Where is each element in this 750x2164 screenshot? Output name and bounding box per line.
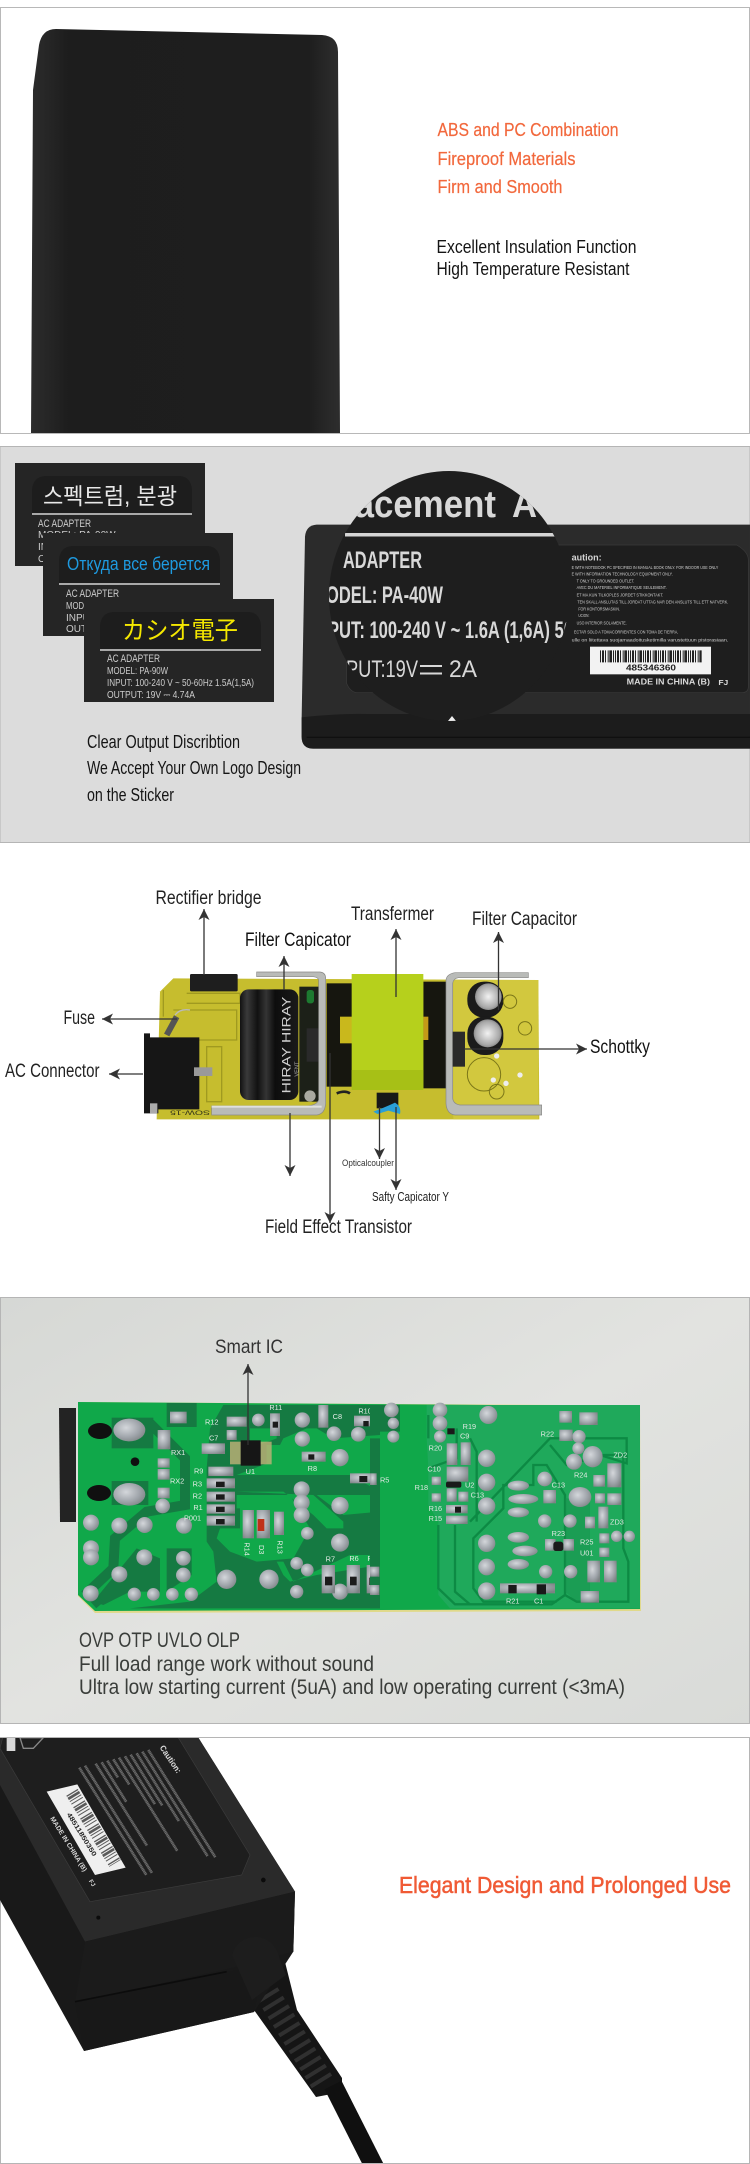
callout: Safty Capicator Y xyxy=(372,1107,449,1204)
adapter photo: 48511850350 xyxy=(65,1812,98,1858)
adapter photo with label: FJ xyxy=(718,678,728,687)
silkscreen labels left: R13 xyxy=(275,1540,284,1554)
adapter photo with label: AVEC DU MATERIEL INFORMATIQUE SEULEMENT. xyxy=(577,585,667,591)
sticker sample: Korean xyxy=(15,463,205,566)
filter capacitor large xyxy=(240,989,298,1100)
silkscreen labels left xyxy=(170,1403,377,1564)
magnifier lens over label: ADAPTER xyxy=(343,547,422,574)
panel background xyxy=(0,446,750,842)
yellow circuit board photo: HIRAY HIRAY xyxy=(280,997,294,1093)
silkscreen labels left: R11 xyxy=(269,1403,282,1412)
adapter photo with label: ECTAR SOLO A TOMACORRIENTES CON TOMA DE TIERRA. xyxy=(574,629,678,635)
adapter photo: MADE IN CHINA (B) xyxy=(48,1816,88,1873)
callout: Rectifier bridge: Rectifier bridge xyxy=(156,888,262,909)
silkscreen labels left: U1 xyxy=(246,1467,255,1476)
panel: PCB bottom view xyxy=(0,1298,750,1724)
orange feature list: Fireproof Materials xyxy=(438,149,576,169)
solder pads xyxy=(83,1405,380,1601)
sticker sample: Russian: MODEL: PA-90W xyxy=(66,601,126,612)
insulation description: Excellent Insulation Function xyxy=(436,237,636,257)
sticker sample: Korean: MODEL: PA-90W xyxy=(38,530,116,541)
sticker sample: Russian: AC ADAPTER xyxy=(66,588,119,600)
left heat sink xyxy=(212,972,326,1115)
sticker description text: on the Sticker xyxy=(87,785,174,805)
adapter photo: Caution: xyxy=(158,1743,184,1775)
sticker description text xyxy=(87,732,301,805)
right copper traces and pads: R21 xyxy=(506,1596,519,1605)
callout: Filter Capacitor: Filter Capacitor xyxy=(472,909,578,930)
silkscreen labels left: RX2 xyxy=(170,1476,184,1485)
transformer xyxy=(352,974,423,1090)
panel: housing material xyxy=(0,8,750,434)
sticker sample: Korean: INPUT xyxy=(38,542,68,553)
callout: Filter Capicator xyxy=(245,930,352,990)
protection features text xyxy=(79,1629,625,1699)
optocoupler and safety capacitor xyxy=(377,1093,398,1108)
sticker sample: Russian: Откуда все берется xyxy=(67,554,210,574)
sticker sample: Korean: OUTPUT xyxy=(38,554,79,565)
silkscreen labels left: R2 xyxy=(193,1491,202,1500)
magnifier lens over label: 2A xyxy=(449,656,477,683)
right copper traces and pads: R20 xyxy=(429,1444,442,1453)
sticker sample: Japanese: AC ADAPTER xyxy=(107,653,160,665)
sticker sample: Russian: OUTPUT: 19V xyxy=(66,624,130,635)
callout: Rectifier bridge xyxy=(156,888,262,975)
right copper traces and pads: R22 xyxy=(541,1429,554,1438)
adapter photo with label: ulle on liitettava suojamaadoitusketimilla varustettuun pistorasiaan. xyxy=(572,637,728,643)
panel: PCB top view xyxy=(5,888,650,1238)
adapter photo with label: USO INTERIOR SOLAMENTE. xyxy=(577,621,627,627)
silkscreen labels left: RX1 xyxy=(171,1448,185,1457)
insulation description xyxy=(436,237,636,279)
panel background xyxy=(0,1298,750,1724)
sticker sample: Japanese: OUTPUT: 19V ⎓ 4.74A xyxy=(107,690,195,701)
orange feature list xyxy=(438,120,618,197)
right copper traces and pads: U01 xyxy=(580,1549,593,1558)
callout: Smart IC xyxy=(215,1337,283,1445)
output capacitors xyxy=(467,982,503,1055)
adapter photo with label: E WITH INFORMATION TECHNOLOGY EQUIPMENT ONLY. xyxy=(572,572,673,578)
adapter photo with label: T ONLY TO GROUNDED OUTLET. xyxy=(577,578,634,584)
adapter photo with label: aution: xyxy=(572,553,602,563)
headline: Elegant Design and Prolonged Use xyxy=(399,1872,731,1898)
yellow circuit board photo: SOW-15 xyxy=(170,1109,210,1116)
sticker sample: Russian xyxy=(43,533,233,636)
right copper traces and pads: C9 xyxy=(460,1431,469,1440)
silkscreen labels left: R12 xyxy=(205,1417,218,1426)
silkscreen labels left: C8 xyxy=(333,1412,342,1421)
right copper traces and pads: U2 xyxy=(465,1481,474,1490)
sticker sample: Japanese: MODEL: PA-90W xyxy=(107,666,168,677)
silkscreen labels left: D3 xyxy=(257,1545,266,1554)
sticker sample: Korean: 스펙트럼, 분광 xyxy=(43,483,177,509)
silkscreen labels left: R10 xyxy=(358,1406,372,1415)
adapter photo with label: FOR KONTORSMASKIN. xyxy=(578,606,620,612)
silkscreen labels left: R1 xyxy=(193,1503,203,1512)
rating sticker xyxy=(0,1735,250,1902)
panel frame xyxy=(0,8,750,434)
orange feature list: Firm and Smooth xyxy=(438,177,562,197)
silkscreen labels left: R4 xyxy=(367,1554,377,1563)
callout: Fuse: Fuse xyxy=(64,1008,95,1029)
silkscreen labels left: P001 xyxy=(184,1513,201,1522)
magnifier lens over label: ODEL: PA-40W xyxy=(326,582,443,609)
magnifier lens over label: AC xyxy=(512,484,562,526)
adapter body xyxy=(0,1735,295,2051)
callout: Transfermer: Transfermer xyxy=(351,904,435,925)
right copper traces and pads: R23 xyxy=(552,1529,565,1538)
small SMD parts xyxy=(216,1421,376,1585)
right copper traces and pads: R5 xyxy=(380,1475,389,1484)
small printed caution lines xyxy=(79,1750,215,1875)
silkscreen labels left: R7 xyxy=(326,1555,335,1564)
right copper traces and pads: R25 xyxy=(580,1537,593,1546)
adapter photo with label xyxy=(302,525,750,749)
adapter photo with label: 485346360 xyxy=(626,663,677,672)
callout: Filter Capicator: Filter Capicator xyxy=(245,930,352,951)
sticker sample: Russian: INPUT: 100-240 V xyxy=(66,613,147,624)
magnifier lens over label: PUT:19V xyxy=(346,656,418,683)
right copper traces and pads: ZD3 xyxy=(610,1517,624,1526)
panel: sticker and logo xyxy=(0,446,750,842)
silkscreen labels left: R9 xyxy=(194,1466,203,1475)
adapter photo: FJ xyxy=(87,1879,96,1888)
schottky diode xyxy=(453,1032,465,1067)
fuse xyxy=(167,1017,177,1035)
right copper traces and pads: R19 xyxy=(463,1422,476,1431)
magnifier lens over label: PUT: 100-240 V ~ 1.6A (1,6A) 50 xyxy=(328,617,573,644)
right copper traces and pads: R24 xyxy=(574,1471,587,1480)
protection features text: OVP OTP UVLO OLP xyxy=(79,1629,240,1652)
callout: Filter Capacitor xyxy=(472,909,578,1010)
panel: finished adapter xyxy=(0,1735,750,2164)
adapter cable xyxy=(254,1964,383,2163)
insulation description: High Temperature Resistant xyxy=(436,259,630,279)
unlabelled down arrow xyxy=(289,1113,291,1176)
sticker description text: Clear Output Discribtion xyxy=(87,732,240,752)
right copper traces and pads: C1 xyxy=(534,1596,543,1605)
right copper traces and pads xyxy=(370,1403,640,1608)
adapter photo with label: UCION: xyxy=(578,613,589,619)
sticker sample: Japanese: カシオ電子 xyxy=(122,617,238,645)
callout: Schottky: Schottky xyxy=(590,1037,650,1058)
callout: Transfermer xyxy=(351,904,435,997)
right copper traces and pads: ZD2 xyxy=(613,1451,627,1460)
sticker description text: We Accept Your Own Logo Design xyxy=(87,758,301,778)
sticker sample: Japanese xyxy=(84,599,274,702)
adapter photo with label: MADE IN CHINA (B) xyxy=(627,677,710,687)
callout: Smart IC: Smart IC xyxy=(215,1337,283,1358)
silkscreen labels left: R3 xyxy=(193,1480,202,1489)
right copper traces and pads: R18 xyxy=(415,1483,428,1492)
silkscreen labels left: R14 xyxy=(242,1542,251,1556)
sticker sample: Japanese: INPUT: 100-240 V ~ 50-60Hz 1.5A(1,5A) xyxy=(107,678,254,689)
callout: AC Connector: AC Connector xyxy=(5,1061,100,1082)
smart IC chip xyxy=(230,1440,272,1466)
callout: Opticalcoupler xyxy=(342,1107,394,1169)
right heat sink xyxy=(446,973,542,1115)
magnifier lens over label: lacement xyxy=(345,484,496,526)
yellow circuit board photo: VENT xyxy=(295,1061,301,1077)
right copper traces and pads: C10 xyxy=(427,1465,441,1474)
callout: Fuse xyxy=(64,1008,177,1029)
adapter housing photo xyxy=(31,29,340,433)
callout: Opticalcoupler: Opticalcoupler xyxy=(342,1158,394,1169)
adapter photo with label: ET MA KUN TILKOPLES JORDET STIKKONTAKT. xyxy=(577,592,663,598)
magnifier lens over label xyxy=(326,471,573,721)
silkscreen labels left: R8 xyxy=(308,1464,317,1473)
AC connector xyxy=(144,1033,199,1113)
right copper traces and pads: R16 xyxy=(429,1504,442,1513)
left copper traces and pads xyxy=(83,1403,380,1608)
board holes xyxy=(87,1423,139,1501)
right copper traces and pads: C13 xyxy=(471,1491,484,1500)
callout: Field Effect Transistor: Field Effect Transistor xyxy=(265,1217,413,1238)
protection features text: Full load range work without sound xyxy=(79,1653,374,1676)
right copper traces and pads: C13 xyxy=(552,1480,565,1489)
orange feature list: ABS and PC Combination xyxy=(438,120,618,140)
silkscreen labels left: C7 xyxy=(209,1433,218,1442)
strain relief collar xyxy=(232,1937,286,2000)
connector behind board xyxy=(59,1408,76,1522)
callout: Safty Capicator Y: Safty Capicator Y xyxy=(372,1189,449,1204)
protection features text: Ultra low starting current (5uA) and low operating current (<3mA) xyxy=(79,1676,625,1699)
sticker sample: Korean: AC ADAPTER xyxy=(38,518,91,530)
green circuit board photo xyxy=(78,1402,641,1613)
barcode xyxy=(47,1784,126,1875)
adapter photo xyxy=(0,1735,376,2164)
yellow circuit board photo xyxy=(144,972,542,1119)
right copper traces and pads: R15 xyxy=(429,1514,442,1523)
panel frame xyxy=(0,1738,750,2164)
silkscreen labels left: R6 xyxy=(349,1554,359,1563)
